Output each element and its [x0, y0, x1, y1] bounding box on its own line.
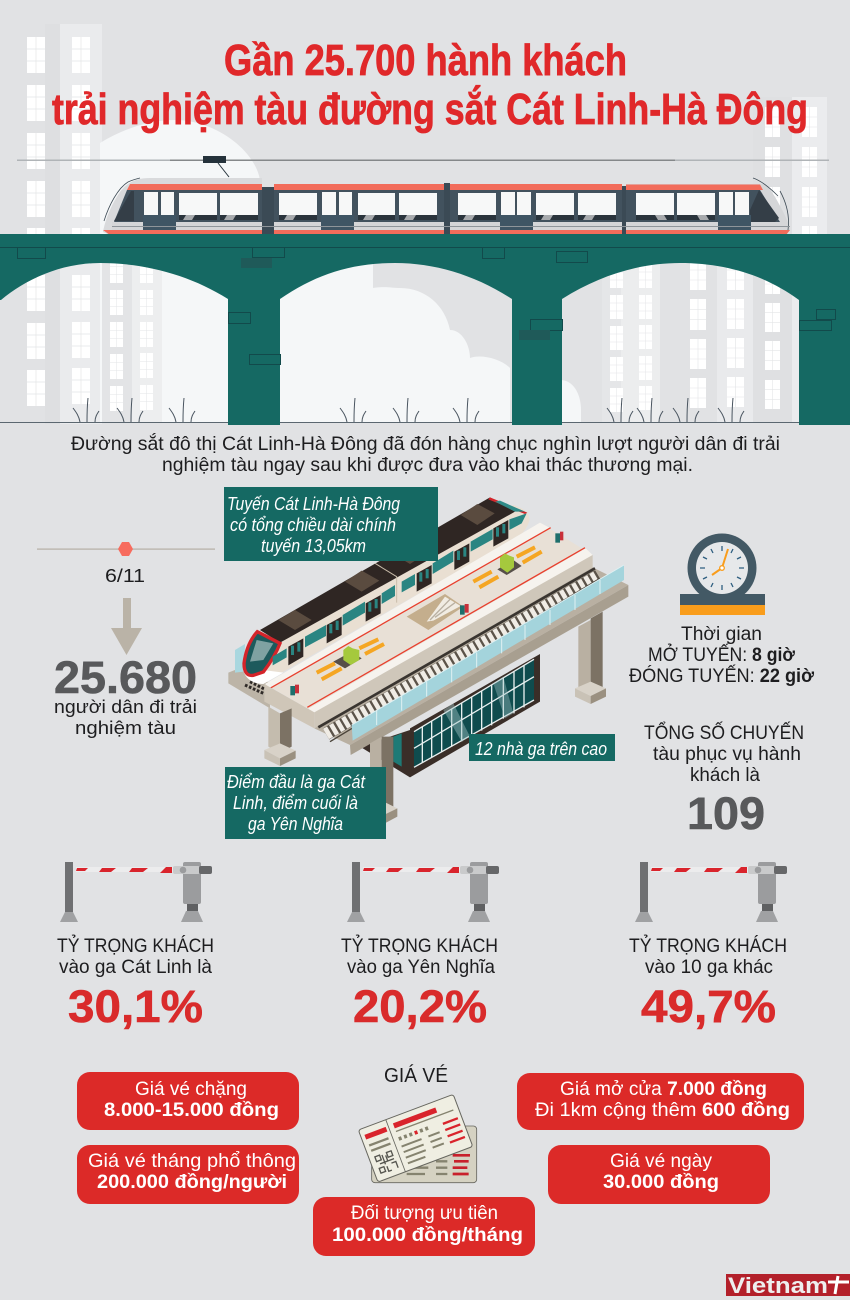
text: operating hours: MỞ TUYẾN: 8 giờ [648, 644, 795, 666]
heading: ticket price: GIÁ VÉ [384, 1064, 448, 1087]
stat: 109 trips: 109 [687, 788, 765, 839]
pill: segment fare [77, 1072, 299, 1130]
icon: down arrow [111, 598, 142, 655]
pill: priority fare [313, 1197, 535, 1256]
timeline: 6/11 marker: 6/11 [105, 566, 145, 586]
stat: 25.680 riders: 25.680 [54, 652, 197, 703]
text: operating hours [629, 624, 814, 687]
platform [264, 523, 593, 728]
stat: other stations share: 49,7% [641, 981, 776, 1032]
pill: base fare: Đi 1km cộng thêm 600 đồng [535, 1099, 790, 1121]
stat: Yên Nghĩa share: vào ga Yên Nghĩa [347, 957, 495, 978]
stat: 109 trips: tàu phục vụ hành [653, 744, 801, 765]
pill: base fare: Giá mở cửa 7.000 đồng [560, 1078, 767, 1100]
title [52, 36, 808, 134]
stat: Yên Nghĩa share [341, 862, 499, 1032]
pill: daily fare: Giá vé ngày [610, 1150, 712, 1172]
front pillar [366, 737, 397, 825]
stat: other stations share: vào 10 ga khác [645, 957, 773, 978]
stat: 109 trips: khách là [690, 765, 760, 786]
title: Gần 25.700 hành khách [224, 36, 627, 85]
illustration: viaduct bridge [0, 234, 850, 425]
intro text: Đường sắt đô thị Cát Linh-Hà Đông đã đón hàng chục nghìn lượt người dân đi trải [71, 433, 780, 455]
stairwell [407, 594, 463, 630]
pill: monthly fare: Giá vé tháng phổ thông [88, 1150, 296, 1172]
stat: Cát Linh share: TỶ TRỌNG KHÁCH [57, 935, 214, 957]
illustration: isometric elevated station [228, 497, 628, 825]
stat: Yên Nghĩa share: 20,2% [353, 981, 487, 1032]
pill: daily fare [548, 1145, 770, 1204]
train [243, 497, 529, 684]
station hall [360, 654, 540, 777]
stat: 109 trips: TỔNG SỐ CHUYẾN [644, 722, 804, 744]
text: operating hours: ĐÓNG TUYẾN: 22 giờ [629, 665, 814, 687]
stat: Cát Linh share [57, 862, 214, 1032]
icon: clock [680, 534, 765, 615]
pill: base fare [517, 1073, 804, 1130]
stat: Cát Linh share: 30,1% [68, 981, 203, 1032]
icon: tickets [358, 1094, 477, 1183]
timeline: 6/11 marker [37, 542, 215, 586]
illustration: train [103, 178, 790, 235]
benches [317, 547, 542, 679]
back pillar [575, 612, 606, 704]
callout: first and last station [225, 767, 386, 839]
pill: segment fare: 8.000-15.000 đồng [104, 1099, 279, 1121]
illustration: city background [0, 24, 850, 424]
logo: Vietnam+ [726, 1273, 850, 1298]
icon: overhead wire and pantograph [17, 156, 829, 177]
left end deck [228, 667, 270, 708]
bins [290, 532, 563, 695]
logo: Vietnam+: Vietnam [728, 1273, 828, 1298]
left pillar [264, 707, 296, 766]
callout: line length [224, 487, 438, 561]
callout: 12 stations [469, 734, 615, 761]
stat: Cát Linh share: vào ga Cát Linh là [59, 957, 212, 978]
intro text [71, 433, 780, 476]
callout: first and last station: Linh, điểm cuối là [233, 792, 358, 813]
intro text: nghiệm tàu ngay sau khi được đưa vào khai thác thương mại. [162, 455, 693, 476]
stat: 25.680 riders: người dân đi trải [54, 696, 197, 717]
stat: other stations share [629, 862, 787, 1032]
grass [73, 398, 744, 422]
text: operating hours: Thời gian [681, 624, 762, 645]
pill: daily fare: 30.000 đồng [603, 1171, 719, 1193]
pill: priority fare: Đối tượng ưu tiên [351, 1202, 498, 1224]
lower deck and track [314, 565, 628, 755]
callout: first and last station: ga Yên Nghĩa [248, 813, 343, 834]
pill: priority fare: 100.000 đồng/tháng [332, 1224, 523, 1246]
kiosks [333, 553, 522, 668]
callout: line length: Tuyến Cát Linh-Hà Đông [227, 493, 401, 514]
callout: first and last station: Điểm đầu là ga Cát [227, 771, 366, 792]
stat: 25.680 riders: nghiệm tàu [75, 717, 176, 738]
callout: 12 stations: 12 nhà ga trên cao [475, 738, 607, 759]
stat: other stations share: TỶ TRỌNG KHÁCH [629, 935, 787, 957]
stat: 25.680 riders [54, 652, 197, 738]
callout: line length: tuyến 13,05km [261, 535, 366, 556]
stat: Yên Nghĩa share: TỶ TRỌNG KHÁCH [341, 935, 498, 957]
stat: 109 trips [644, 722, 804, 839]
callout: line length: có tổng chiều dài chính [230, 514, 396, 535]
pill: segment fare: Giá vé chặng [135, 1078, 247, 1100]
pill: monthly fare [77, 1145, 299, 1204]
pill: monthly fare: 200.000 đồng/người [97, 1171, 287, 1193]
